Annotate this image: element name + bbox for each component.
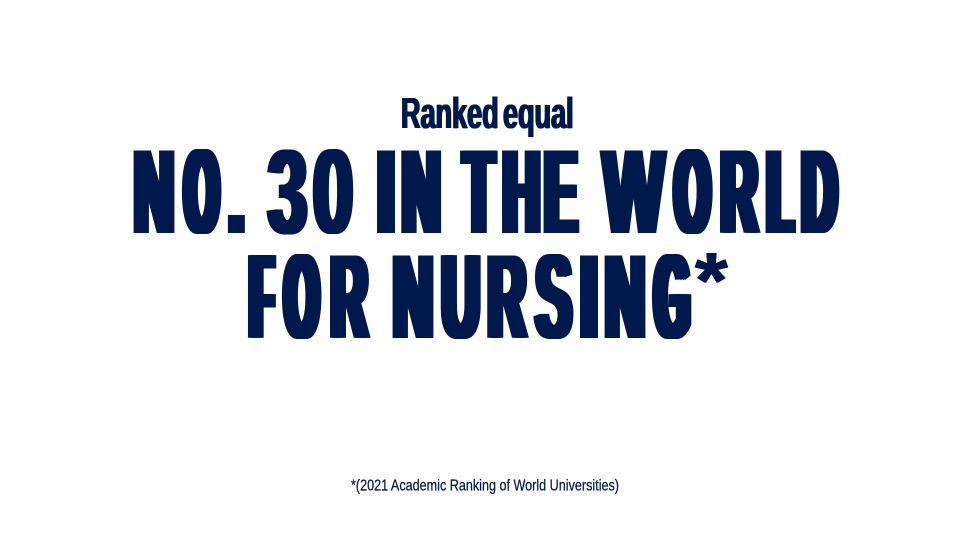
heading line 2: for nursing: S [536, 230, 571, 364]
heading line 1: No. 30 in the world: H [503, 125, 539, 259]
heading line 1: No. 30 in the world: . [220, 125, 253, 259]
heading line 1: No. 30 in the world: 3 [268, 125, 307, 259]
heading line 2: for nursing: G [655, 230, 689, 364]
heading line 2: for nursing: O [285, 230, 318, 364]
heading line 2: for nursing [248, 230, 728, 364]
heading line 1: No. 30 in the world: T [464, 125, 494, 259]
heading line 2: for nursing: F [251, 230, 272, 364]
heading line 2: for nursing: I [572, 230, 606, 364]
heading line 1: No. 30 in the world: I [369, 125, 403, 259]
heading line 2: for nursing: N [393, 230, 433, 364]
subheading: Ranked equal [401, 90, 574, 138]
heading line 1: No. 30 in the world: O [185, 125, 218, 259]
heading line 1: No. 30 in the world [134, 125, 840, 259]
heading line 1: No. 30 in the world: L [768, 125, 792, 259]
heading line 1: No. 30 in the world: 0 [313, 125, 353, 259]
subheading: Ranked equal: Ranked [401, 90, 499, 138]
heading line 2: for nursing: R [331, 230, 367, 364]
heading line 2: for nursing: * [695, 236, 728, 325]
heading line 1: No. 30 in the world: W [603, 125, 664, 259]
heading line 1: No. 30 in the world: O [675, 125, 709, 259]
heading line 2: for nursing: U [442, 230, 479, 364]
heading line 1: No. 30 in the world: N [402, 125, 441, 259]
heading line 1: No. 30 in the world: N [134, 125, 174, 259]
heading line 1: No. 30 in the world: R [721, 125, 757, 259]
subheading: Ranked equal: equal [503, 90, 574, 138]
heading line 1: No. 30 in the world: D [802, 125, 837, 259]
heading line 2: for nursing: R [488, 230, 526, 364]
heading line 2: for nursing: N [605, 230, 645, 364]
heading line 1: No. 30 in the world: E [545, 125, 577, 259]
